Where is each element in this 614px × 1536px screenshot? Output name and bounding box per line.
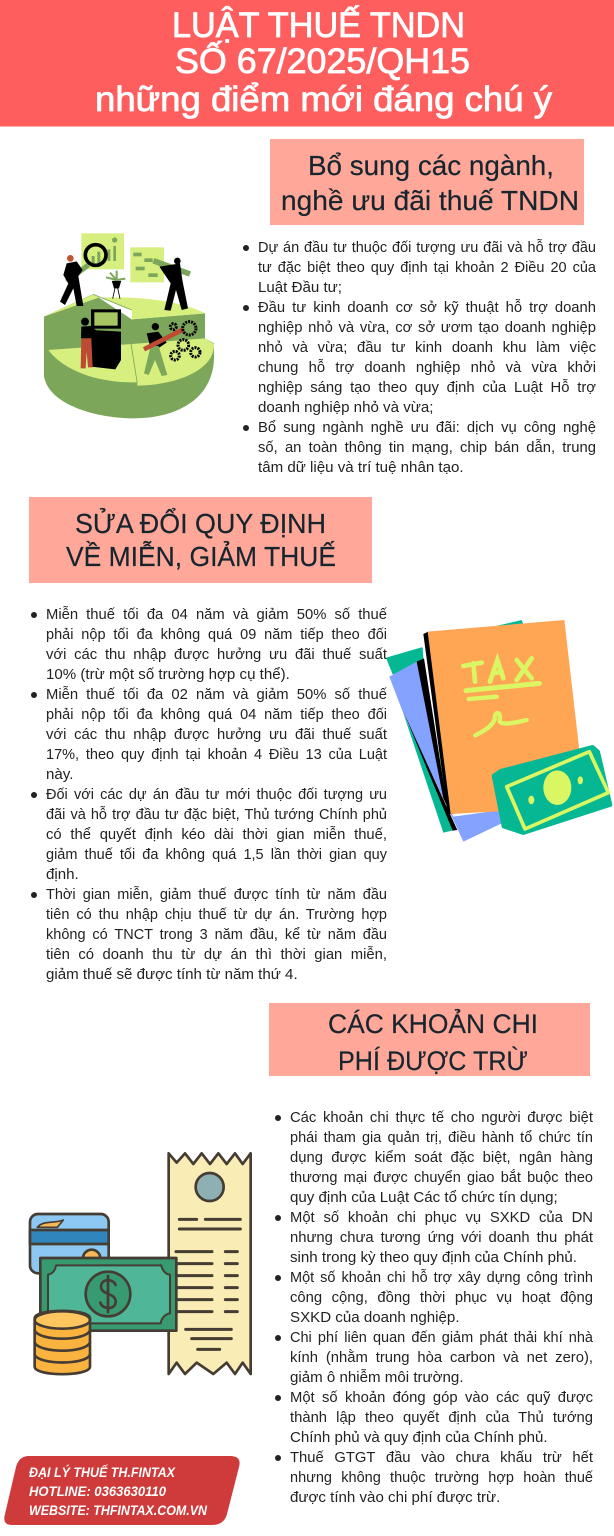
bullet list: section 2: tiên có doanh thu từ dự án thì thời gian miễn,	[46, 947, 387, 963]
bullet list: section 3: sinh trong kỳ theo quy định của Chính phủ.	[290, 1249, 577, 1266]
bullet list: section 3: nhưng chưa tương ứng với doanh thu phát	[290, 1230, 593, 1246]
contact badge: WEBSITE: THFINTAX.COM.VN	[29, 1502, 208, 1518]
contact badge: HOTLINE: 0363630110	[29, 1483, 166, 1499]
bullet list: section 1: tâm dữ liệu và trí tuệ nhân tạo.	[258, 459, 464, 476]
bullet list: section 3: thành lập theo quyết định của Thủ tướng	[290, 1410, 593, 1426]
bullet list: section 2: Đối với các dự án đầu tư mới thuộc đối tượng ưu	[46, 787, 387, 803]
heading: section 2: VỀ MIỄN, GIẢM THUẾ	[66, 540, 336, 572]
bullet list: section 2	[31, 606, 387, 983]
bullet list: section 2: Thời gian miễn, giảm thuế được tính từ năm đầu	[46, 887, 387, 903]
bullet list: section 3: nhưng không thuộc trường hợp hoàn thuế	[290, 1470, 593, 1486]
bullet list: section 1	[243, 239, 596, 476]
heading: section 1	[270, 139, 584, 225]
bullet list: section 1: số, an toàn thông tin mạng, chip bán dẫn, trung	[258, 440, 596, 456]
bullet list: section 3: kính (nhằm trung hòa carbon và net zero),	[290, 1350, 593, 1366]
bullet list: section 1: nghiệp nhỏ và vừa, cơ sở ươm tạo doanh nghiệp	[258, 320, 596, 336]
bullet list: section 2: đãi và hỗ trợ đầu tư đặc biệt, Thủ tướng Chính phủ	[46, 807, 387, 823]
bullet list: section 2: với các thu nhập được hưởng ưu đãi thuế suất	[46, 727, 387, 743]
bullet list: section 1: nhỏ và vừa; đầu tư kinh doanh khu làm việc	[258, 340, 596, 356]
heading: section 1: nghề ưu đãi thuế TNDN	[281, 185, 579, 216]
bullet list: section 1: chung hỗ trợ doanh nghiệp nhỏ và vừa khởi	[258, 360, 596, 376]
bullet list: section 1: nghiệp sáng tạo theo quy định của Luật Hỗ trợ	[258, 380, 596, 396]
heading: section 3	[269, 1003, 590, 1076]
bullet list: section 1: tư đặc biệt theo quy định tại khoản 2 Điều 20 của	[258, 260, 596, 276]
bullet list: section 2: không có TNCT trong 3 năm đầu, kể từ năm đầu	[46, 927, 387, 943]
bullet list: section 3: Một số khoản đóng góp vào các quỹ được	[290, 1390, 593, 1406]
bullet list: section 3: Một số khoản chi phục vụ SXKD của DN	[290, 1210, 593, 1226]
bullet list: section 2: có thể quyết định kéo dài thời gian miễn thuế,	[46, 827, 387, 843]
heading: section 1: Bổ sung các ngành,	[308, 150, 554, 181]
bullet list: section 2: giảm thuế sẽ được tính từ năm thứ 4.	[46, 966, 298, 983]
bullet list: section 3: Chi phí liên quan đến giảm phát thải khí nhà	[290, 1330, 593, 1346]
heading: section 2: SỬA ĐỔI QUY ĐỊNH	[75, 507, 326, 539]
bullet list: section 3: thương mại được chuyển giao bắt buộc theo	[290, 1170, 593, 1186]
heading: section 3: PHÍ ĐƯỢC TRỪ	[338, 1045, 528, 1076]
bullet list: section 2: tiên có thu nhập chịu thuế từ dự án. Trường hợp	[46, 907, 387, 923]
bullet list: section 1: Đầu tư kinh doanh cơ sở kỹ thuật hỗ trợ doanh	[258, 300, 596, 316]
title banner: SỐ 67/2025/QH15	[175, 41, 470, 81]
heading: section 3: CÁC KHOẢN CHI	[328, 1007, 538, 1039]
bullet list: section 3: công cộng, đồng thời phục vụ hoạt động	[290, 1290, 593, 1306]
bullet list: section 3: dụng được kiểm soát đặc biệt, ngân hàng	[290, 1150, 593, 1166]
bullet list: section 3: SXKD của doanh nghiệp.	[290, 1309, 460, 1326]
contact badge: ĐẠI LÝ THUẾ TH.FINTAX	[29, 1463, 176, 1480]
bullet list: section 1: Luật Đầu tư;	[258, 279, 342, 296]
title banner	[0, 0, 614, 126]
title banner: LUẬT THUẾ TNDN	[172, 5, 465, 45]
bullet list: section 3: Chính phủ và quy định của Chính phủ.	[290, 1429, 548, 1446]
title banner: những điểm mới đáng chú ý	[95, 80, 553, 119]
bullet list: section 3: quy định của Luật Các tổ chức tín dụng;	[290, 1189, 558, 1206]
bullet list: section 3: giảm ô nhiễm môi trường.	[290, 1369, 464, 1386]
bullet list: section 3	[275, 1110, 593, 1506]
bullet list: section 2: này.	[46, 766, 73, 783]
bullet list: section 2: định.	[46, 866, 79, 883]
bullet list: section 1: Dự án đầu tư thuộc đối tượng ưu đãi và hỗ trợ đầu	[258, 240, 596, 256]
bullet list: section 2: giảm thuế tối đa không quá 1,5 lần thời gian quy	[46, 847, 387, 863]
bullet list: section 2: 10% (trừ một số trường hợp cụ thể).	[46, 666, 290, 683]
bullet list: section 3: được tính vào chi phí được trừ.	[290, 1489, 500, 1506]
bullet list: section 3: Thuế GTGT đầu vào chưa khấu trừ hết	[290, 1450, 593, 1466]
bullet list: section 2: 17%, theo quy định tại khoản 4 Điều 13 của Luật	[46, 747, 387, 763]
bullet list: section 2: Miễn thuế tối đa 04 năm và giảm 50% số thuế	[46, 607, 387, 623]
bullet list: section 3: Các khoản chi thực tế cho người được biệt	[290, 1110, 593, 1126]
bullet list: section 3: Một số khoản chi hỗ trợ xây dựng công trình	[290, 1270, 593, 1286]
bullet list: section 2: Miễn thuế tối đa 02 năm và giảm 50% số thuế	[46, 687, 387, 703]
bullet list: section 2: phải nộp tối đa không quá 04 năm tiếp theo đối	[46, 707, 387, 723]
bullet list: section 2: phải nộp tối đa không quá 09 năm tiếp theo đối	[46, 627, 387, 643]
heading: section 2	[29, 497, 372, 583]
bullet list: section 1: Bổ sung ngành nghề ưu đãi: dịch vụ công nghệ	[258, 420, 596, 436]
bullet list: section 1: doanh nghiệp nhỏ và vừa;	[258, 399, 433, 416]
bullet list: section 3: phái tham gia quản trị, điều hành tổ chức tín	[290, 1130, 593, 1146]
bullet list: section 2: với các thu nhập được hưởng ưu đãi thuế suất	[46, 647, 387, 663]
